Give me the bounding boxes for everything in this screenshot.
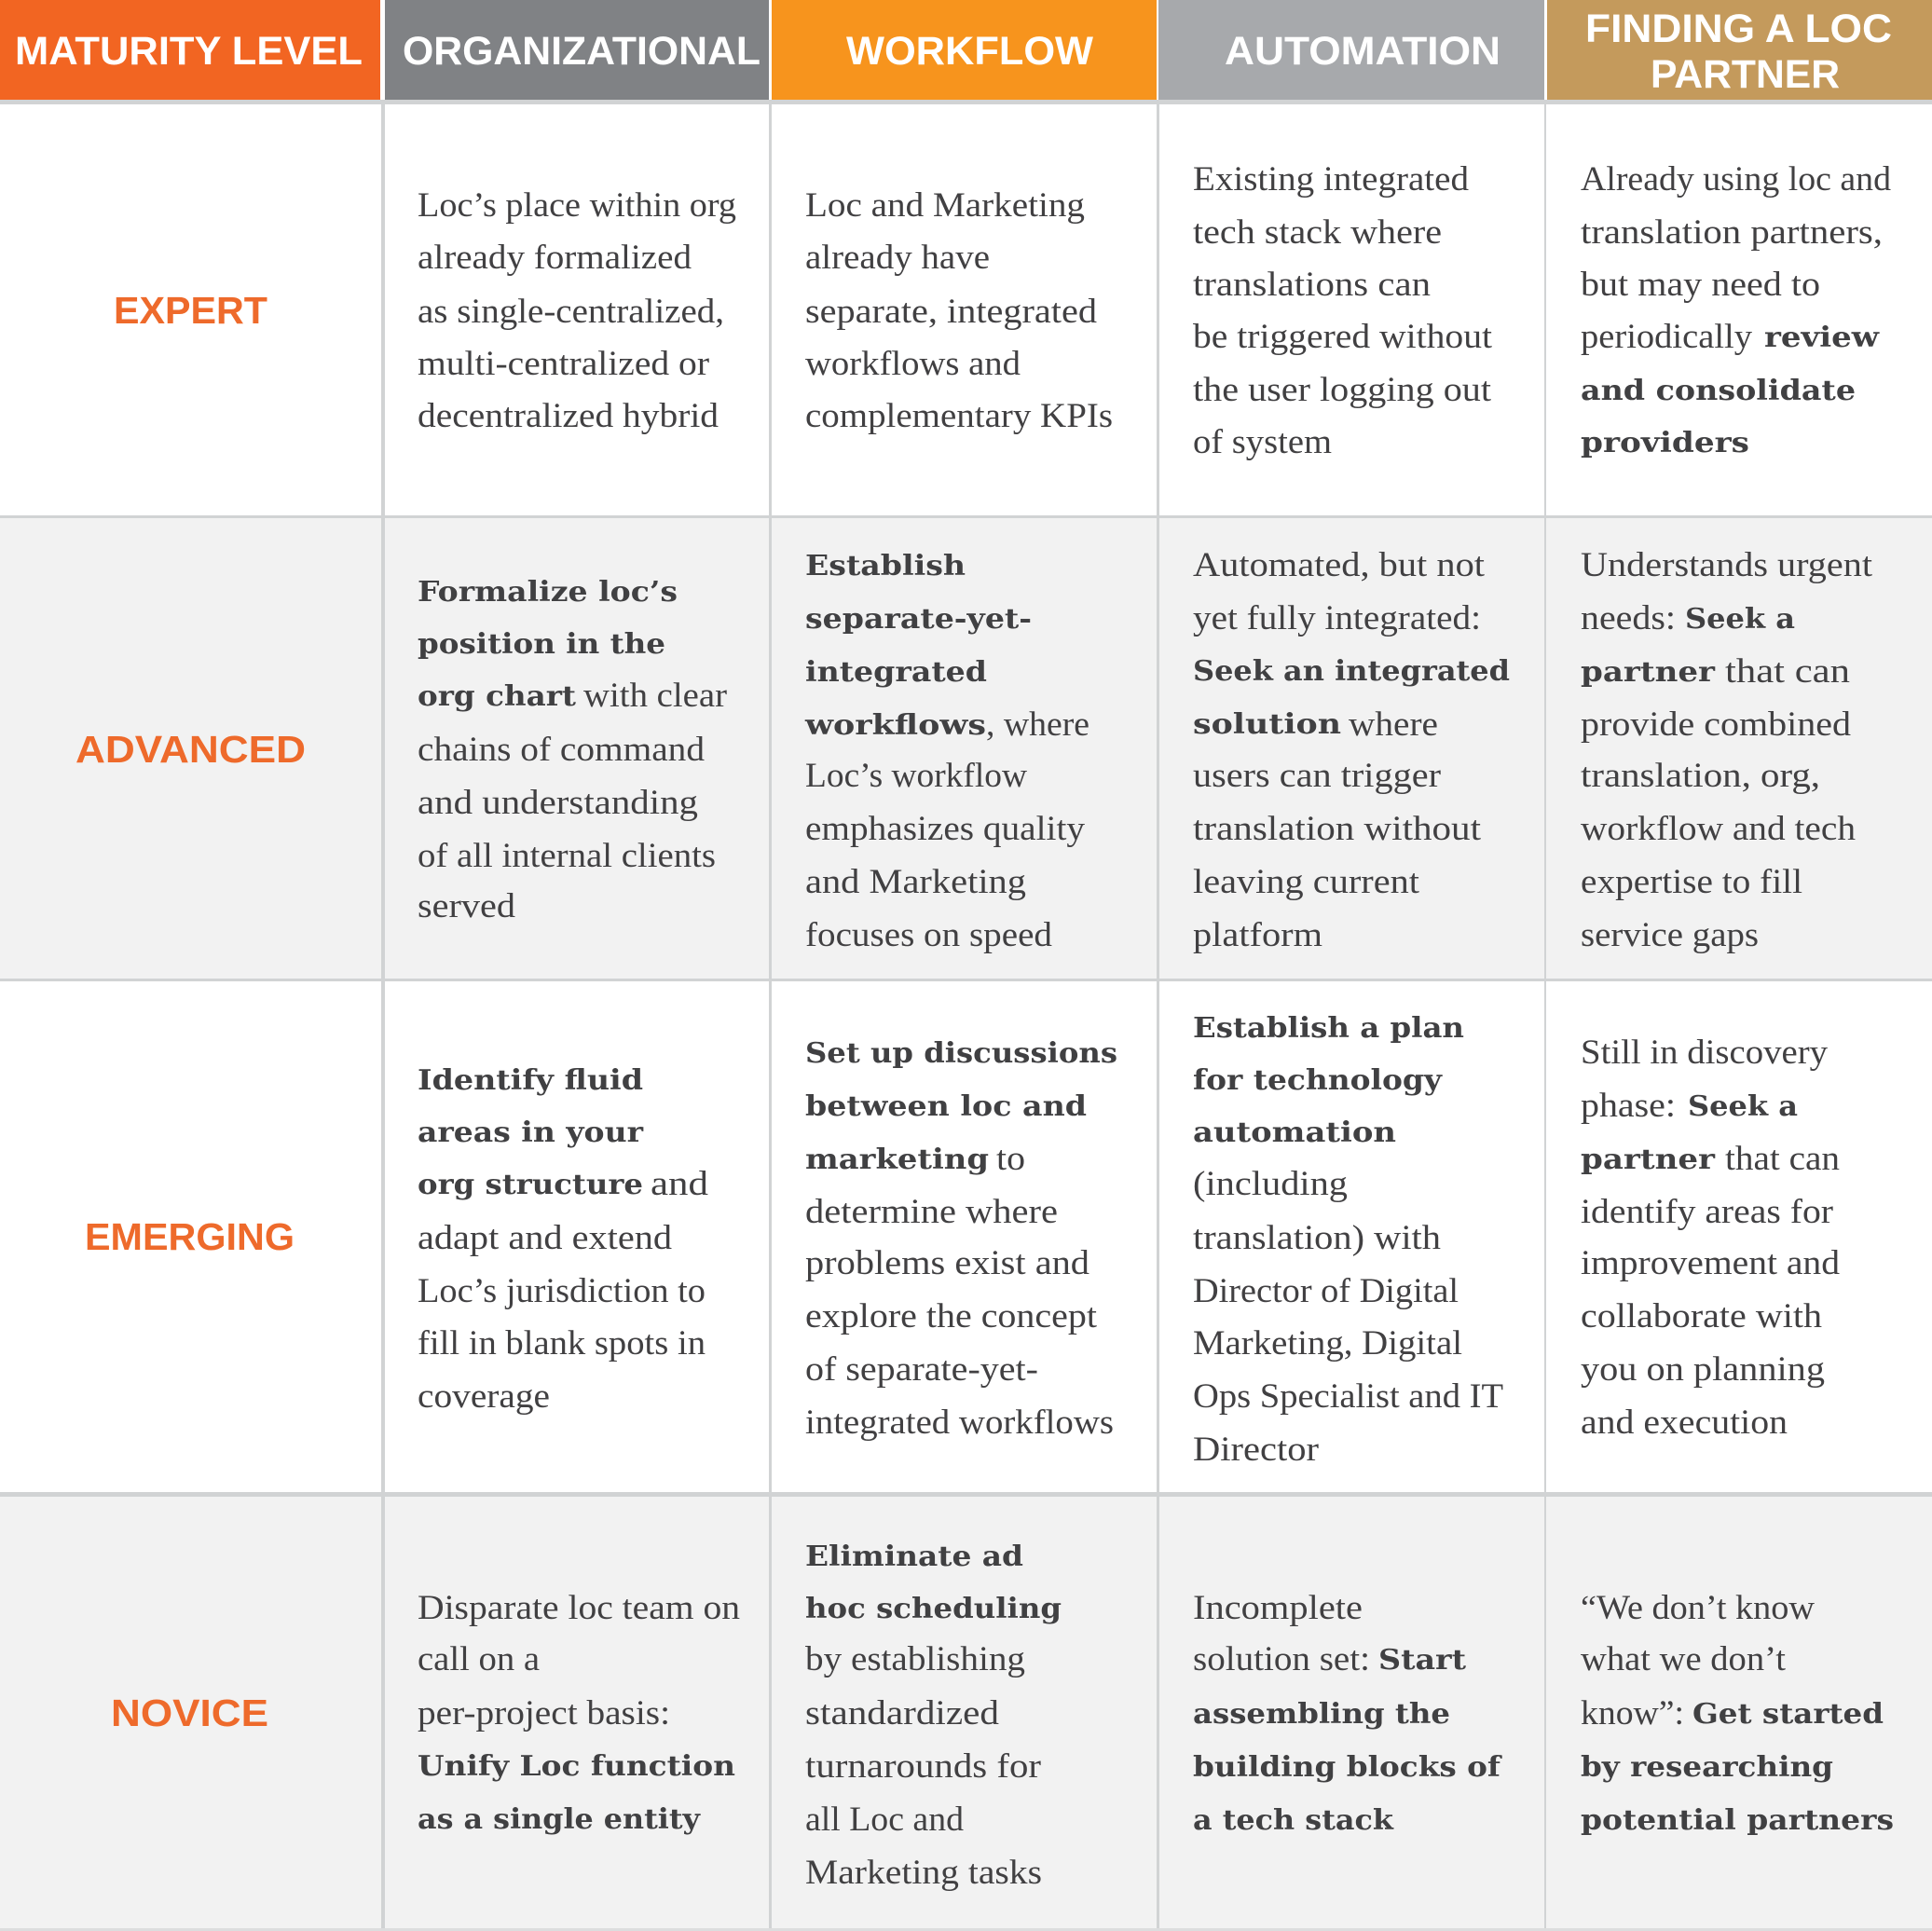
header: automation xyxy=(1158,0,1544,100)
advanced partner text: partner xyxy=(1581,656,1716,689)
header: organizational: ORGANIZATIONAL xyxy=(403,29,760,74)
emerging partner text: and execution xyxy=(1581,1404,1788,1442)
advanced automation text: Automated, but not xyxy=(1193,546,1486,584)
novice organizational text xyxy=(418,1589,740,1836)
novice workflow text xyxy=(805,1541,1062,1892)
expert workflow text: Loc and Marketing xyxy=(805,186,1085,225)
emerging workflow text xyxy=(805,1037,1117,1442)
emerging organizational text: Identify fluid xyxy=(418,1064,643,1097)
emerging partner text: identify areas for xyxy=(1581,1193,1833,1231)
expert automation text: translations can xyxy=(1193,266,1431,304)
advanced partner text: expertise to fill xyxy=(1581,863,1802,901)
advanced automation text xyxy=(1193,546,1510,954)
header: automation: AUTOMATION xyxy=(1225,29,1500,74)
header: workflow xyxy=(772,0,1157,100)
advanced workflow text xyxy=(804,550,1089,954)
emerging automation text: translation) with xyxy=(1193,1219,1442,1257)
advanced partner text: Understands urgent xyxy=(1581,546,1873,584)
expert automation text: of system xyxy=(1193,423,1332,461)
novice automation text: Start xyxy=(1378,1644,1466,1677)
emerging workflow text: explore the concept xyxy=(805,1297,1098,1335)
advanced organizational text: with clear xyxy=(583,677,727,715)
emerging partner text: partner xyxy=(1581,1144,1716,1176)
advanced partner text: workflow and tech xyxy=(1581,810,1857,848)
advanced partner text: provide combined xyxy=(1581,705,1852,744)
emerging organizational text xyxy=(418,1064,709,1416)
expert partner text: but may need to xyxy=(1581,266,1820,304)
emerging partner text: collaborate with xyxy=(1581,1297,1823,1335)
expert workflow text: separate, integrated xyxy=(805,293,1098,331)
advanced automation text: yet fully integrated: xyxy=(1193,599,1481,637)
emerging workflow text: Set up discussions xyxy=(805,1037,1117,1070)
novice automation text: a tech stack xyxy=(1193,1804,1394,1837)
emerging organizational text: areas in your xyxy=(418,1116,644,1149)
advanced workflow text: and Marketing xyxy=(805,863,1026,901)
novice workflow text: hoc scheduling xyxy=(805,1593,1062,1625)
header: organizational xyxy=(385,0,769,100)
expert organizational text xyxy=(418,186,736,435)
novice partner text: “We don’t know xyxy=(1581,1589,1815,1627)
advanced organizational text: and understanding xyxy=(418,784,698,822)
novice workflow text: Eliminate ad xyxy=(805,1541,1023,1573)
expert partner text: periodically xyxy=(1581,318,1753,356)
emerging organizational text: adapt and extend xyxy=(418,1219,673,1257)
advanced workflow text: Establish xyxy=(805,550,966,582)
advanced partner text: needs: xyxy=(1581,599,1676,637)
expert partner text: Already using loc and xyxy=(1581,160,1891,199)
emerging workflow text: integrated workflows xyxy=(805,1404,1114,1442)
advanced workflow text: focuses on speed xyxy=(805,916,1053,954)
level: expert: EXPERT xyxy=(114,289,267,332)
novice automation text: solution set: xyxy=(1193,1640,1370,1678)
novice partner text: potential partners xyxy=(1581,1804,1894,1837)
header: workflow: WORKFLOW xyxy=(846,29,1093,74)
novice automation text: Incomplete xyxy=(1193,1589,1363,1627)
expert organizational text: already formalized xyxy=(418,239,692,277)
advanced organizational text: position in the xyxy=(418,628,665,661)
expert partner text: translation partners, xyxy=(1581,213,1883,252)
novice workflow text: by establishing xyxy=(805,1640,1025,1678)
expert automation text: tech stack where xyxy=(1193,213,1442,252)
emerging automation text: Marketing, Digital xyxy=(1193,1324,1462,1363)
expert automation text: be triggered without xyxy=(1193,318,1493,356)
advanced automation text: where xyxy=(1349,705,1438,744)
advanced workflow text: , where xyxy=(986,705,1089,744)
expert workflow text: complementary KPIs xyxy=(805,397,1113,435)
emerging workflow text: to xyxy=(996,1140,1025,1178)
advanced organizational text: Formalize loc’s xyxy=(418,576,678,609)
expert organizational text: Loc’s place within org xyxy=(418,186,736,225)
emerging partner text: phase: xyxy=(1581,1087,1676,1125)
emerging automation text: Establish a plan xyxy=(1193,1012,1464,1045)
novice workflow text: turnarounds for xyxy=(805,1747,1041,1786)
novice partner text: Get started xyxy=(1692,1698,1884,1731)
emerging partner text: Still in discovery xyxy=(1581,1034,1829,1072)
expert partner text xyxy=(1581,160,1891,459)
advanced organizational text: of all internal clients xyxy=(418,837,716,875)
emerging workflow text: marketing xyxy=(805,1144,989,1176)
emerging organizational text: coverage xyxy=(418,1377,550,1416)
level: emerging: EMERGING xyxy=(85,1215,295,1258)
emerging organizational text: org structure xyxy=(418,1169,643,1201)
novice workflow text: standardized xyxy=(805,1694,1000,1732)
header: maturity level xyxy=(0,0,380,100)
advanced automation text: users can trigger xyxy=(1193,757,1441,795)
novice organizational text: as a single entity xyxy=(418,1803,702,1836)
emerging automation text: Director of Digital xyxy=(1193,1272,1459,1310)
novice automation text xyxy=(1193,1589,1502,1837)
novice organizational text: per-project basis: xyxy=(418,1694,670,1732)
emerging partner text: Seek a xyxy=(1688,1090,1798,1123)
advanced automation text: translation without xyxy=(1193,810,1482,848)
advanced partner text: service gaps xyxy=(1581,916,1759,954)
emerging automation text: for technology xyxy=(1193,1064,1444,1097)
expert workflow text: workflows and xyxy=(805,345,1021,383)
level: advanced: ADVANCED xyxy=(75,728,306,771)
emerging automation text: Ops Specialist and IT xyxy=(1193,1377,1503,1416)
novice partner text: by researching xyxy=(1581,1751,1833,1784)
novice partner text: know”: xyxy=(1581,1694,1684,1732)
novice workflow text: all Loc and xyxy=(805,1801,965,1839)
level: novice: NOVICE xyxy=(111,1691,268,1734)
expert partner text: providers xyxy=(1581,427,1749,459)
advanced organizational text: chains of command xyxy=(418,731,706,769)
expert organizational text: as single-centralized, xyxy=(418,293,724,331)
advanced partner text xyxy=(1581,546,1873,954)
advanced organizational text: org chart xyxy=(418,680,576,713)
advanced workflow text: workflows xyxy=(804,709,986,742)
header: maturity level: MATURITY LEVEL xyxy=(15,29,363,74)
advanced partner text: that can xyxy=(1725,652,1850,691)
expert workflow text: already have xyxy=(805,239,990,277)
emerging workflow text: of separate-yet- xyxy=(805,1350,1038,1389)
novice organizational text: call on a xyxy=(418,1640,540,1678)
expert automation text: Existing integrated xyxy=(1193,160,1470,199)
advanced workflow text: Loc’s workflow xyxy=(805,757,1027,795)
expert partner text: review xyxy=(1764,322,1880,354)
expert automation text xyxy=(1193,160,1493,461)
advanced partner text: translation, org, xyxy=(1581,757,1820,795)
advanced automation text: Seek an integrated xyxy=(1193,655,1510,688)
emerging workflow text: determine where xyxy=(805,1193,1058,1231)
emerging organizational text: and xyxy=(651,1165,709,1203)
advanced partner text: Seek a xyxy=(1685,603,1795,636)
emerging partner text: you on planning xyxy=(1581,1350,1825,1389)
advanced organizational text xyxy=(418,576,727,925)
advanced workflow text: integrated xyxy=(805,656,987,689)
emerging automation text: automation xyxy=(1193,1116,1396,1149)
header: finding a loc partner xyxy=(1547,0,1932,100)
advanced automation text: leaving current xyxy=(1193,863,1420,901)
header: finding a loc partner: FINDING A LOC xyxy=(1585,7,1892,51)
emerging automation text: (including xyxy=(1193,1165,1348,1203)
emerging workflow text: problems exist and xyxy=(805,1244,1090,1282)
advanced automation text: solution xyxy=(1193,708,1341,741)
advanced automation text: platform xyxy=(1193,916,1322,954)
emerging partner text: that can xyxy=(1725,1140,1840,1178)
novice organizational text: Disparate loc team on xyxy=(418,1589,740,1627)
emerging partner text xyxy=(1581,1034,1841,1442)
advanced workflow text: separate-yet- xyxy=(805,603,1032,636)
emerging organizational text: Loc’s jurisdiction to xyxy=(418,1272,706,1310)
header: finding a loc partner: PARTNER xyxy=(1651,52,1840,97)
emerging automation text xyxy=(1193,1012,1503,1469)
novice automation text: building blocks of xyxy=(1193,1751,1502,1784)
expert workflow text xyxy=(805,186,1113,435)
expert automation text: the user logging out xyxy=(1193,371,1492,409)
expert organizational text: multi-centralized or xyxy=(418,345,709,383)
novice workflow text: Marketing tasks xyxy=(805,1854,1042,1892)
advanced workflow text: emphasizes quality xyxy=(805,810,1086,848)
novice partner text: what we don’t xyxy=(1581,1640,1787,1678)
emerging organizational text: fill in blank spots in xyxy=(418,1324,706,1363)
emerging partner text: improvement and xyxy=(1581,1244,1841,1282)
emerging automation text: Director xyxy=(1193,1431,1319,1469)
novice partner text xyxy=(1581,1589,1894,1837)
expert organizational text: decentralized hybrid xyxy=(418,397,719,435)
expert partner text: and consolidate xyxy=(1581,375,1856,407)
novice automation text: assembling the xyxy=(1193,1698,1450,1731)
novice organizational text: Unify Loc function xyxy=(418,1750,735,1783)
advanced organizational text: served xyxy=(418,887,516,925)
emerging workflow text: between loc and xyxy=(805,1090,1087,1123)
